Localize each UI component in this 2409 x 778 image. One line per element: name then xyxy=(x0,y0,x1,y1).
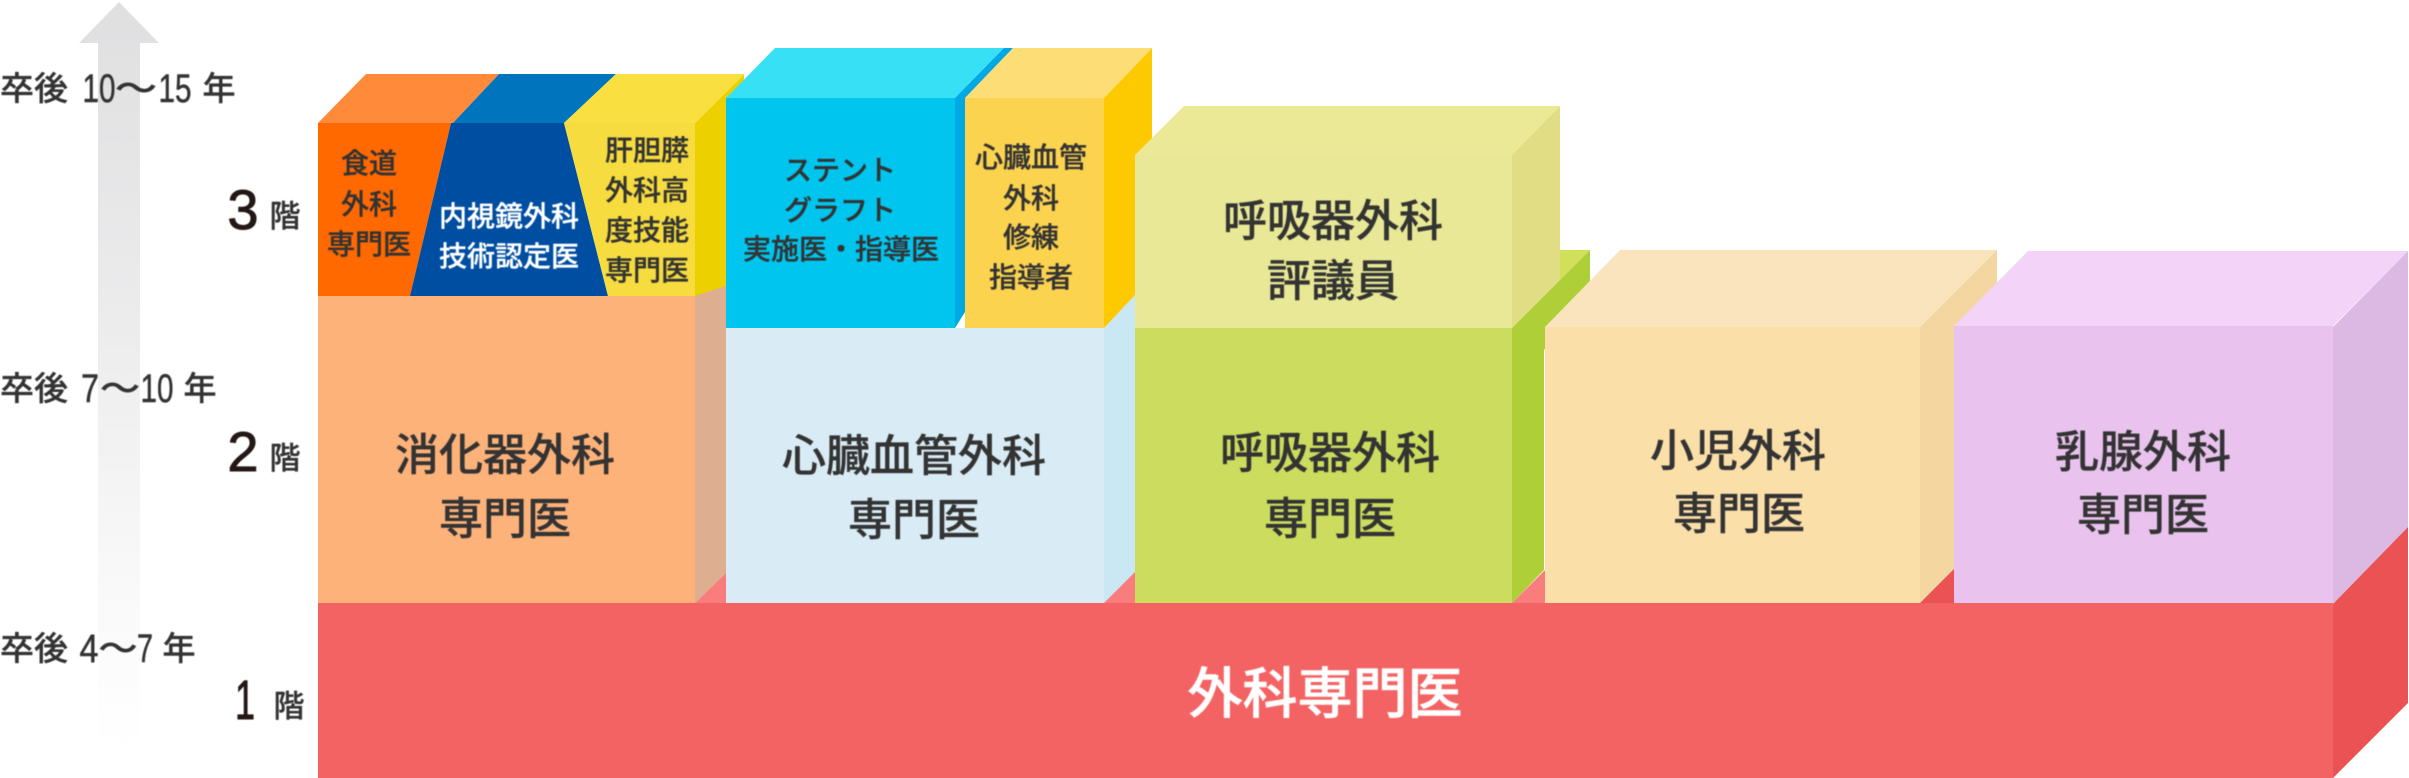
panel: stent graft: グラフト xyxy=(784,195,896,226)
label: years 10-15: 年 xyxy=(202,70,236,107)
label: years 7-10: 年 xyxy=(184,370,216,407)
panel: gastroenterological surgery specialist xyxy=(318,296,695,603)
label: years 7-10 xyxy=(0,367,216,411)
panel: cardiovascular surgery specialist xyxy=(726,295,1135,603)
text: esophageal surgery specialist: 専門医 xyxy=(327,229,411,260)
panel: cardiovascular training instructor: 指導者 xyxy=(989,262,1073,293)
floor label 2: 2 xyxy=(227,420,259,483)
floor label 2 xyxy=(227,420,300,483)
text: hepatobiliary pancreatic: 肝胆膵 xyxy=(605,135,689,166)
panel: cardiovascular surgery specialist: 専門医 xyxy=(848,496,980,545)
panel: esophageal / endoscopic / HBP tier 3 xyxy=(318,74,744,296)
label: years 4-7: 年 xyxy=(162,630,196,667)
panel: gastroenterological surgery specialist: 専門医 xyxy=(439,495,571,544)
floor label 1: 階 xyxy=(274,689,304,724)
label: years 7-10: 10 xyxy=(140,367,174,411)
floor label 3: 3 xyxy=(227,178,259,241)
text: endoscopic surgery certified: 内視鏡外科 xyxy=(439,201,579,232)
label: years 4-7 xyxy=(0,627,196,671)
label: years 10-15 xyxy=(0,67,236,111)
floor label 3: 階 xyxy=(270,199,300,234)
label: years 4-7: 〜 xyxy=(98,630,138,667)
label: years 7-10: 卒後 xyxy=(0,370,68,407)
panel: surgery specialist base: 外科専門医 xyxy=(1187,663,1463,725)
panel: respiratory surgery councilor: 呼吸器外科 xyxy=(1223,197,1443,246)
panel: gastroenterological surgery specialist: 消化器外科 xyxy=(395,431,615,480)
label: years 4-7: 7 xyxy=(137,627,153,671)
panel: cardiovascular training instructor: 修練 xyxy=(1003,222,1059,253)
panel: cardiovascular training instructor: 外科 xyxy=(1003,183,1059,214)
panel: stent graft: 実施医・指導医 xyxy=(743,234,939,265)
panel: breast surgery specialist: 専門医 xyxy=(2077,491,2209,540)
text: esophageal surgery specialist xyxy=(327,148,411,260)
panel: stent graft: ステント xyxy=(784,155,896,186)
text: endoscopic surgery certified: 技術認定医 xyxy=(439,241,579,272)
label: years 4-7: 4 xyxy=(80,627,98,671)
panel: breast surgery specialist: 乳腺外科 xyxy=(2055,428,2231,477)
panel: cardiovascular training instructor: 心臓血管 xyxy=(975,142,1087,173)
label: years 10-15: 〜 xyxy=(115,70,157,107)
text: hepatobiliary pancreatic: 度技能 xyxy=(605,215,689,246)
text: esophageal surgery specialist: 外科 xyxy=(341,189,397,220)
label: years 10-15: 10 xyxy=(82,67,116,111)
panel: cardiovascular training instructor xyxy=(965,48,1152,328)
text: hepatobiliary pancreatic xyxy=(605,135,689,286)
label: years 7-10: 〜 xyxy=(100,370,140,407)
panel: respiratory surgery specialist xyxy=(1135,250,1590,603)
label: years 4-7: 卒後 xyxy=(0,630,68,667)
panel: pediatric surgery specialist: 専門医 xyxy=(1673,490,1805,539)
label: years 10-15: 卒後 xyxy=(0,70,68,107)
floor label 1: 1 xyxy=(235,668,255,731)
label: years 7-10: 7 xyxy=(81,367,99,411)
block side: gastroenterological xyxy=(695,263,727,603)
panel: respiratory surgery councilor: 評議員 xyxy=(1267,257,1399,306)
label: years 10-15: 15 xyxy=(158,67,192,111)
floor label 3 xyxy=(227,178,300,241)
panel: respiratory surgery councilor xyxy=(1135,106,1560,328)
panel: breast surgery specialist xyxy=(1954,251,2408,604)
text: esophageal surgery specialist: 食道 xyxy=(341,148,397,179)
arrow: years after graduation xyxy=(79,2,159,760)
floor label 1 xyxy=(235,668,304,731)
text: endoscopic surgery certified xyxy=(439,201,579,272)
panel: cardiovascular surgery specialist: 心臓血管外科 xyxy=(782,432,1046,481)
text: hepatobiliary pancreatic: 外科高 xyxy=(605,175,689,206)
panel: respiratory surgery specialist: 呼吸器外科 xyxy=(1220,429,1440,478)
panel: stent graft xyxy=(726,48,1013,328)
floor label 2: 階 xyxy=(270,441,300,476)
panel: pediatric surgery specialist: 小児外科 xyxy=(1650,427,1826,476)
text: hepatobiliary pancreatic: 専門医 xyxy=(605,255,689,286)
panel: pediatric surgery specialist xyxy=(1545,250,1997,603)
panel: surgery specialist base xyxy=(318,527,2408,778)
panel: respiratory surgery specialist: 専門医 xyxy=(1264,495,1396,544)
